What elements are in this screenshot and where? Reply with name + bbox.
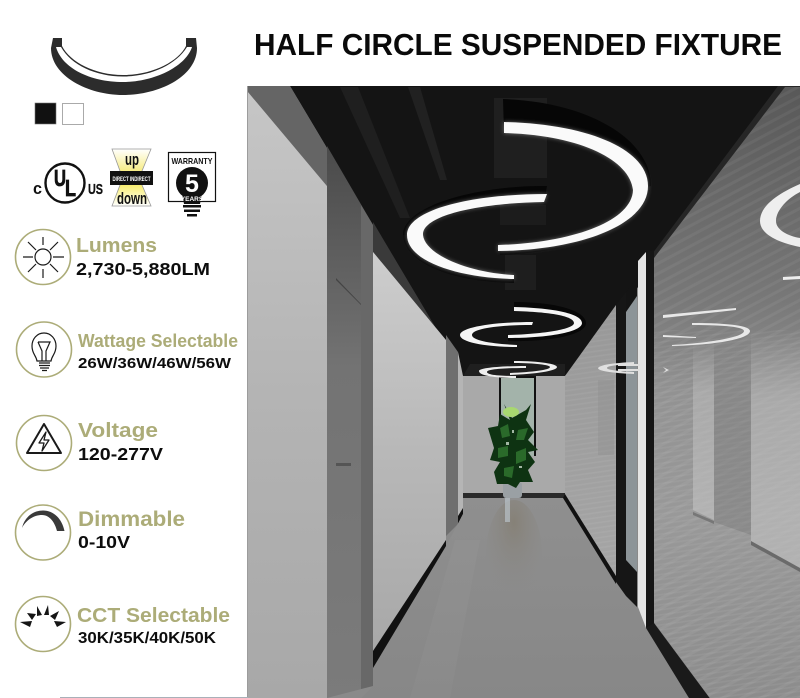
photo: office corridor with suspended fixtures bbox=[248, 86, 800, 698]
direct indirect up/down badge: DIRECT INDIRECT bbox=[112, 176, 151, 183]
UL listing mark: US bbox=[88, 181, 103, 198]
floor bbox=[361, 498, 691, 698]
bottom edge line bbox=[60, 697, 248, 698]
direct indirect up/down badge: down bbox=[117, 189, 147, 208]
spec: wattage bbox=[16, 322, 238, 377]
glass reflection: middle fixture bbox=[663, 308, 750, 346]
left wall panel bbox=[248, 92, 327, 698]
UL listing mark: L bbox=[65, 175, 76, 201]
plant leaves bbox=[488, 404, 538, 488]
vase reflection bbox=[505, 498, 510, 522]
spec: cct bbox=[16, 596, 230, 652]
glass reflection: large arc bbox=[760, 184, 800, 280]
framed window on back wall bbox=[499, 376, 536, 456]
product image: half circle fixture bbox=[51, 38, 197, 95]
warranty badge bbox=[168, 152, 216, 216]
title: HALF CIRCLE SUSPENDED FIXTURE bbox=[254, 27, 782, 62]
plant vase bbox=[503, 482, 522, 498]
value: voltage: 120-277V bbox=[78, 444, 163, 464]
direct indirect up/down badge bbox=[110, 149, 153, 208]
swatch: white bbox=[62, 104, 84, 124]
door frame bbox=[616, 278, 637, 607]
label: wattage: Wattage Selectable bbox=[78, 331, 238, 351]
third wall section bbox=[446, 335, 463, 536]
warranty badge: YEARS bbox=[181, 196, 204, 203]
baseboard bbox=[373, 540, 446, 668]
glass reflection: small fixture bbox=[598, 362, 669, 374]
dark strip above second wall bbox=[373, 222, 446, 345]
fixture 2: middle bbox=[460, 302, 586, 347]
icon: light bulb bbox=[16, 322, 72, 377]
UL listing mark: c bbox=[33, 179, 42, 198]
swatch: black bbox=[35, 103, 56, 124]
plant bbox=[488, 404, 538, 498]
direct indirect up/down badge: up bbox=[125, 150, 139, 169]
value: lumens: 2,730-5,880LM bbox=[76, 259, 210, 279]
large glass wall bbox=[654, 87, 800, 698]
UL listing mark: U bbox=[54, 165, 66, 191]
door bbox=[327, 146, 373, 698]
spec: lumens bbox=[16, 230, 210, 284]
icon: high voltage triangle bbox=[16, 416, 72, 470]
icon: dimmer arc bbox=[16, 505, 70, 560]
left column divider line bbox=[247, 86, 248, 698]
floor reflection bbox=[486, 500, 542, 610]
value: cct: 30K/35K/40K/50K bbox=[78, 630, 216, 647]
label: cct: CCT Selectable bbox=[77, 605, 230, 627]
back baseboard bbox=[463, 493, 565, 498]
back wall bbox=[463, 376, 565, 494]
label: voltage: Voltage bbox=[78, 419, 158, 442]
ceiling bbox=[290, 86, 800, 376]
warranty badge: WARRANTY bbox=[172, 156, 213, 166]
black column bbox=[646, 250, 654, 628]
left wall top strip bbox=[248, 86, 343, 186]
UL listing mark bbox=[33, 164, 103, 202]
label: dimmable: Dimmable bbox=[78, 508, 185, 531]
warranty badge: 5 bbox=[185, 170, 199, 198]
fixture 3: small bbox=[479, 361, 557, 378]
fixture 1: large bbox=[403, 99, 651, 283]
value: dimmable: 0-10V bbox=[78, 532, 130, 552]
glass base rail bbox=[646, 623, 723, 698]
icon: sun bbox=[16, 230, 70, 284]
spec: voltage bbox=[16, 416, 163, 470]
spec: dimmable bbox=[16, 505, 185, 560]
icon: sunrise rays bbox=[16, 596, 70, 652]
value: wattage: 26W/36W/46W/56W bbox=[78, 355, 232, 372]
label: lumens: Lumens bbox=[76, 234, 157, 257]
floor sheen bbox=[410, 540, 480, 698]
first glass pane bbox=[563, 305, 616, 584]
second wall panel bbox=[373, 252, 446, 651]
white column bbox=[638, 252, 646, 628]
